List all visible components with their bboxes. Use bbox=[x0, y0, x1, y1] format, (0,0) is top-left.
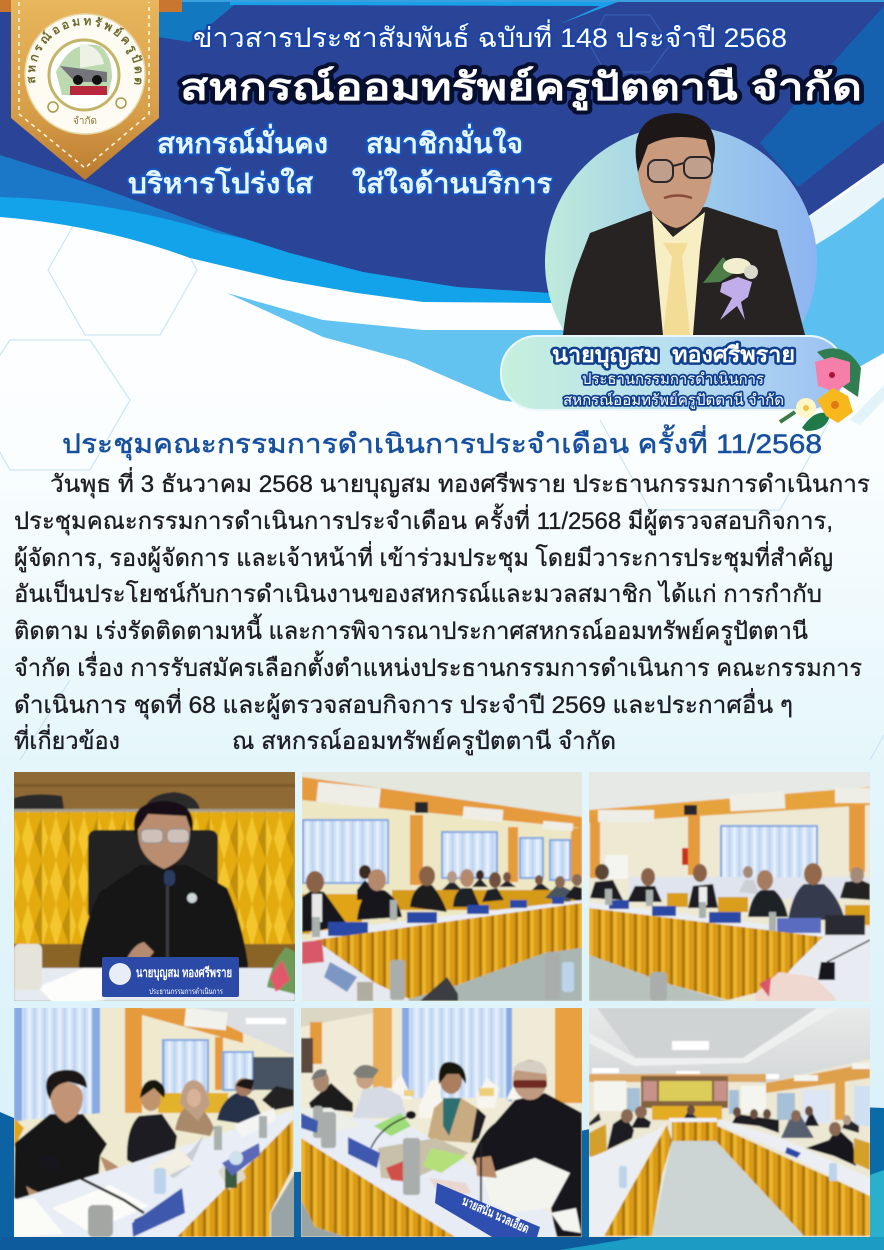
newsletter issue line: ข่าวสารประชาสัมพันธ์ ฉบับที่ 148 ประจำปี 2568 bbox=[193, 19, 787, 53]
tables and floor bbox=[589, 1124, 607, 1158]
head bbox=[637, 118, 713, 228]
woman 4 bbox=[217, 1092, 262, 1124]
main title: สหกรณ์ออมทรัพย์ครูปัตตานี จำกัด bbox=[180, 66, 862, 111]
table bbox=[301, 1116, 557, 1237]
body paragraph: ติดตาม เร่งรัดติดตามหนี้ และการพิจารณาประกาศสหกรณ์ออมทรัพย์ครูปัตตานี bbox=[14, 613, 808, 646]
ribbon badge with logo bbox=[0, 0, 182, 180]
photo 1: chairman at desk bbox=[14, 772, 295, 1001]
body paragraph: จำกัด เรื่อง การรับสมัครเลือกตั้งตำแหน่งประธานกรรมการดำเนินการ คณะกรรมการ bbox=[14, 650, 862, 682]
woman bbox=[127, 1114, 177, 1168]
logo seal bbox=[24, 13, 146, 135]
table and skirt bbox=[310, 900, 582, 940]
body paragraph: ดำเนินการ ชุดที่ 68 และผู้ตรวจสอบกิจการ ประจำปี 2569 และประกาศอื่น ๆ bbox=[14, 688, 793, 720]
boutonniere bbox=[703, 257, 758, 320]
chairman name card: นายบุญสม ทองศรีพราย bbox=[136, 965, 232, 981]
chairman name card bbox=[102, 957, 239, 997]
header wave background bbox=[0, 0, 884, 425]
slogans: บริหารโปร่งใส bbox=[128, 166, 314, 199]
faint bottom-right streak bbox=[850, 385, 884, 425]
bottom band bbox=[0, 1106, 884, 1250]
table bbox=[14, 1110, 293, 1237]
slogans: สมาชิกมั่นใจ bbox=[366, 123, 523, 159]
table and skirt bbox=[589, 902, 827, 938]
tropical flowers bbox=[780, 348, 861, 431]
slogans: ใส่ใจด้านบริการ bbox=[352, 167, 552, 199]
photo 3: meeting room view bbox=[589, 772, 870, 1001]
name card bbox=[435, 1183, 540, 1237]
logo seal: จำกัด bbox=[73, 116, 97, 127]
slogans: สหกรณ์มั่นคง bbox=[157, 123, 328, 159]
people row bbox=[590, 880, 623, 900]
chairman name card: ประธานกรรมการดำเนินการ bbox=[149, 987, 224, 996]
man bbox=[14, 1114, 107, 1208]
body paragraph: อันเป็นประโยชน์กับการดำเนินงานของสหกรณ์และมวลสมาชิก ได้แก่ การกำกับ bbox=[14, 579, 822, 608]
name plate: สหกรณ์ออมทรัพย์ครูปัตตานี จำกัด bbox=[563, 392, 784, 409]
person 3 bbox=[427, 1098, 477, 1143]
back row bbox=[357, 880, 374, 900]
light swoosh bbox=[227, 293, 570, 410]
people bbox=[607, 1116, 634, 1150]
white band on right bbox=[805, 163, 884, 247]
body paragraph: ณ สหกรณ์ออมทรัพย์ครูปัตตานี จำกัด bbox=[232, 727, 616, 756]
body paragraph bbox=[14, 467, 870, 756]
person 2 bbox=[353, 1086, 407, 1118]
person 4 bbox=[472, 1093, 582, 1237]
shirt and tie bbox=[652, 212, 705, 335]
body paragraph: ที่เกี่ยวข้อง bbox=[14, 724, 120, 755]
body paragraph: ผู้จัดการ, รองผู้จัดการ และเจ้าหน้าที่ เข้าร่วมประชุม โดยมีวาระการประชุมที่สำคัญ bbox=[14, 541, 833, 573]
name plate: นายบุญสม ทองศรีพราย bbox=[552, 342, 795, 369]
hijab woman bbox=[175, 1103, 214, 1136]
photo 4: staff at table bbox=[14, 1008, 294, 1237]
front row bbox=[302, 890, 347, 932]
slogans bbox=[128, 123, 552, 199]
chairman portrait bbox=[540, 113, 830, 406]
name plate bbox=[501, 336, 861, 431]
meeting heading: ประชุมคณะกรรมการดำเนินการประจำเดือน ครั้งที่ 11/2568 bbox=[62, 424, 822, 461]
photo 6: wide room view bbox=[589, 1008, 870, 1237]
suit bbox=[563, 207, 805, 335]
photo 5: staff at table with books bbox=[301, 1008, 582, 1237]
photo 2: meeting room view bbox=[302, 772, 582, 1001]
person 1 bbox=[309, 1083, 353, 1112]
body paragraph: วันพุธ ที่ 3 ธันวาคม 2568 นายบุญสม ทองศรีพราย ประธานกรรมการดำเนินการ bbox=[50, 467, 870, 499]
body paragraph: ประชุมคณะกรรมการดำเนินการประจำเดือน ครั้งที่ 11/2568 มีผู้ตรวจสอบกิจการ, bbox=[14, 503, 833, 536]
name plate: ประธานกรรมการดำเนินการ bbox=[582, 371, 764, 388]
